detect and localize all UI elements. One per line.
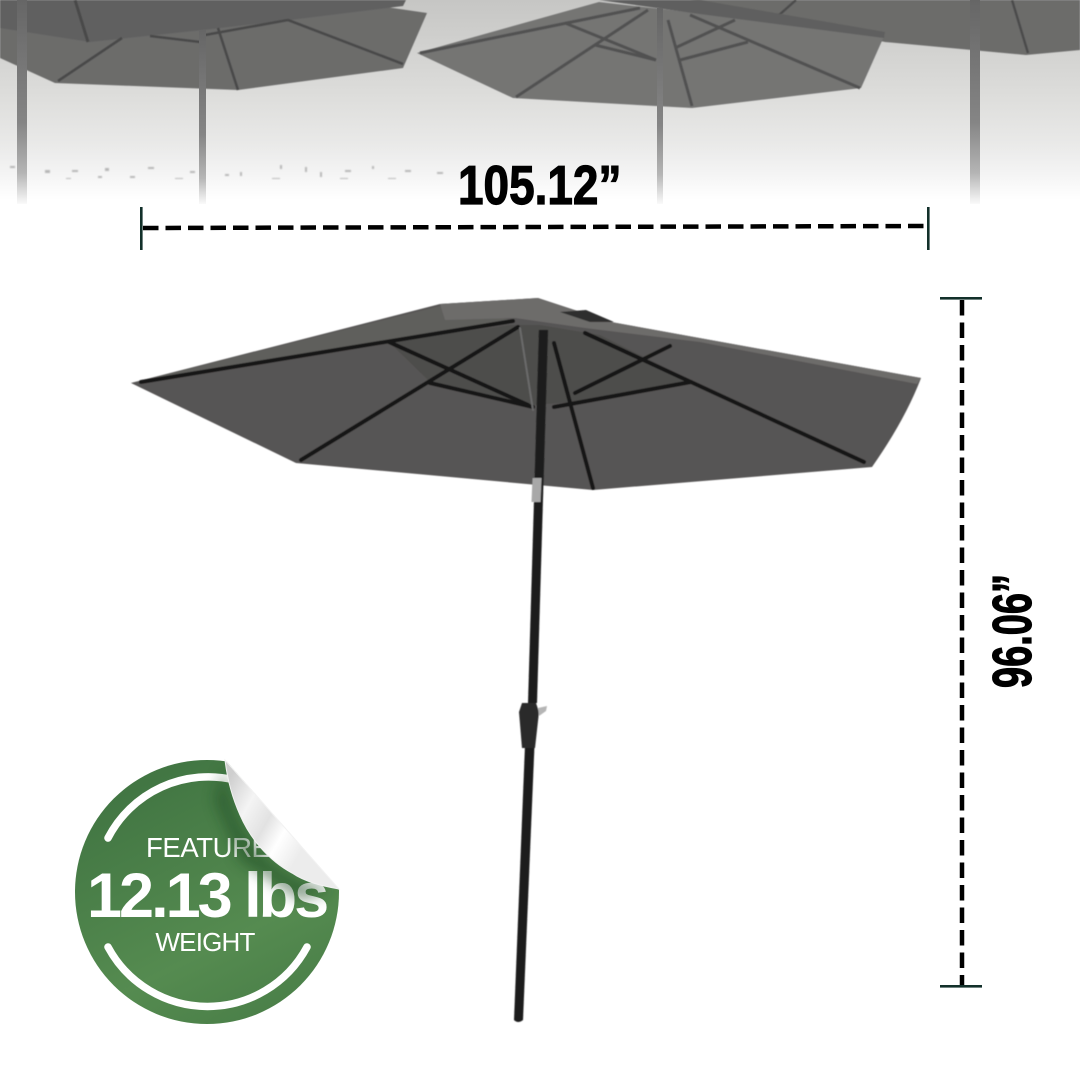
height measurement label: 96.06” bbox=[982, 574, 1044, 688]
sticker text: value: 12.13 lbs bbox=[87, 861, 327, 931]
weight sticker badge bbox=[75, 756, 345, 1024]
background pole second bbox=[199, 30, 206, 204]
background photo: beach with umbrellas bbox=[0, 0, 1080, 204]
peeled sticker fold bbox=[225, 760, 339, 889]
background umbrella center bbox=[417, 0, 885, 108]
background pole left bbox=[17, 0, 27, 204]
width dimension line bbox=[140, 207, 930, 250]
main umbrella bbox=[131, 298, 921, 1022]
umbrella pole bbox=[514, 330, 548, 1022]
sticker fold shadow bbox=[215, 765, 339, 900]
height dimension line bbox=[940, 297, 982, 988]
sticker disc bbox=[75, 760, 339, 1024]
width measurement label: 105.12” bbox=[458, 154, 621, 216]
sticker text: features: FEATURES bbox=[146, 832, 288, 863]
sticker bottom arc bbox=[108, 947, 307, 1006]
background umbrella left rear bbox=[0, 0, 427, 90]
sticker text: weight: WEIGHT bbox=[155, 927, 256, 957]
peeled corner cutout bbox=[222, 756, 345, 890]
umbrella canopy bbox=[131, 298, 921, 490]
umbrella ribs bbox=[141, 321, 864, 488]
sticker top arc bbox=[108, 777, 235, 838]
background umbrella right bbox=[690, 0, 1080, 55]
